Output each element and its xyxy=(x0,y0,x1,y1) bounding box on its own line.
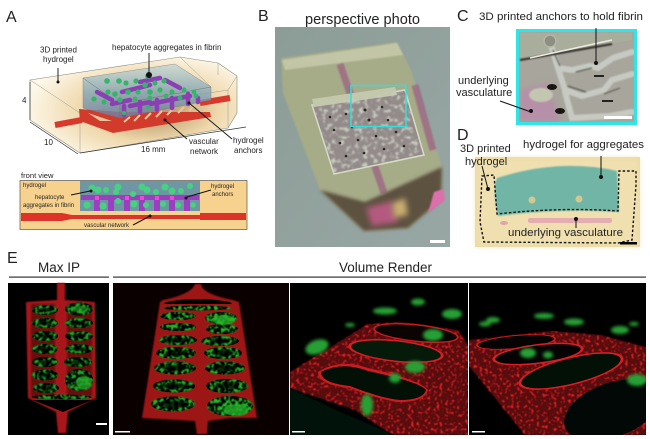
panel A: 3D schematic and front view xyxy=(6,9,264,230)
column title: Max IP: Max IP xyxy=(38,260,80,275)
bottom bevel xyxy=(320,167,442,231)
underlying vasculature label line 2: vasculature xyxy=(456,87,512,99)
fibrin region xyxy=(80,181,200,211)
heading: C: C xyxy=(457,8,469,25)
hepatocyte aggregates xyxy=(91,73,198,115)
column rule: Volume Render xyxy=(113,276,646,278)
scale bar xyxy=(430,240,445,243)
image: volume render whole device xyxy=(113,283,289,435)
labels: hydrogel xyxy=(211,184,234,190)
cyan border xyxy=(518,30,636,124)
vascular network xyxy=(55,98,230,133)
labels: hepatocyte xyxy=(35,195,65,201)
labels: 3D printed xyxy=(40,46,77,54)
hydrogel body xyxy=(20,180,247,230)
heading: B: B xyxy=(258,8,269,25)
heading: E: E xyxy=(7,250,18,267)
labels: network xyxy=(190,147,219,156)
leader lines xyxy=(71,190,211,225)
hydrogel block xyxy=(30,57,237,153)
dimension axes xyxy=(30,82,246,154)
photo background xyxy=(275,27,450,247)
aggregates xyxy=(84,183,196,210)
panel E: fluorescence images xyxy=(7,250,650,439)
underlying vasculature label: underlying xyxy=(458,75,509,87)
labels xyxy=(22,43,264,156)
labels: underlying vasculature xyxy=(508,227,623,239)
photo xyxy=(475,157,640,247)
dashed outline xyxy=(480,171,636,243)
anchors xyxy=(81,195,199,211)
anchor grid xyxy=(312,90,424,174)
front view schematic xyxy=(20,171,247,230)
labels: 4 xyxy=(22,96,27,105)
image: Max IP projection xyxy=(8,283,109,435)
scale bar xyxy=(620,242,637,244)
column title: Volume Render: Volume Render xyxy=(339,260,433,275)
cyan inset box xyxy=(351,86,406,126)
caption: front view xyxy=(21,171,54,180)
labels: hydrogel xyxy=(233,136,264,145)
labels: hydrogel xyxy=(43,55,74,64)
labels: 10 xyxy=(44,138,53,147)
labels: hydrogel xyxy=(23,183,46,189)
column rule: Max IP xyxy=(9,276,109,278)
title: 3D printed anchors to hold fibrin xyxy=(479,11,643,23)
vessel stripe xyxy=(340,64,433,193)
photo background xyxy=(475,157,640,247)
fibrin chamber xyxy=(83,64,211,118)
panel C: anchors close-up xyxy=(456,8,643,124)
labels: vascular network xyxy=(84,223,130,229)
labels: hydrogel for aggregates xyxy=(523,139,645,151)
labels: 3D printed xyxy=(460,143,511,155)
labels: anchors xyxy=(234,146,262,155)
teal gel xyxy=(495,166,619,216)
labels: anchors xyxy=(212,192,233,198)
vessel xyxy=(21,213,246,221)
labels: 16 mm xyxy=(141,145,166,154)
title: perspective photo xyxy=(305,11,420,28)
scale bar xyxy=(604,116,632,119)
printed block xyxy=(281,42,442,231)
labels xyxy=(23,183,234,229)
labels: vascular xyxy=(189,137,219,146)
image: volume render close-up 2 xyxy=(469,283,650,439)
hydrogel anchors xyxy=(97,78,198,115)
image: volume render close-up 1 xyxy=(290,283,468,435)
heading: A: A xyxy=(6,9,17,26)
labels: aggregates in fibrin xyxy=(23,203,74,209)
labels xyxy=(460,139,645,239)
3D chip schematic xyxy=(22,43,264,156)
anchor dots xyxy=(528,196,536,204)
photo background xyxy=(518,30,636,124)
well xyxy=(312,90,424,174)
labels: hydrogel xyxy=(465,156,507,168)
heading: D: D xyxy=(457,127,469,144)
photo xyxy=(518,30,636,124)
labels: hepatocyte aggregates in fibrin xyxy=(112,43,221,52)
leader lines xyxy=(58,53,232,139)
photo xyxy=(275,27,450,247)
leader lines xyxy=(482,156,601,228)
anchors xyxy=(551,45,632,118)
panel D: gel photo xyxy=(457,127,645,247)
pink vasculature xyxy=(528,218,612,223)
leader lines xyxy=(500,28,596,112)
panel B: perspective photo xyxy=(258,8,450,247)
